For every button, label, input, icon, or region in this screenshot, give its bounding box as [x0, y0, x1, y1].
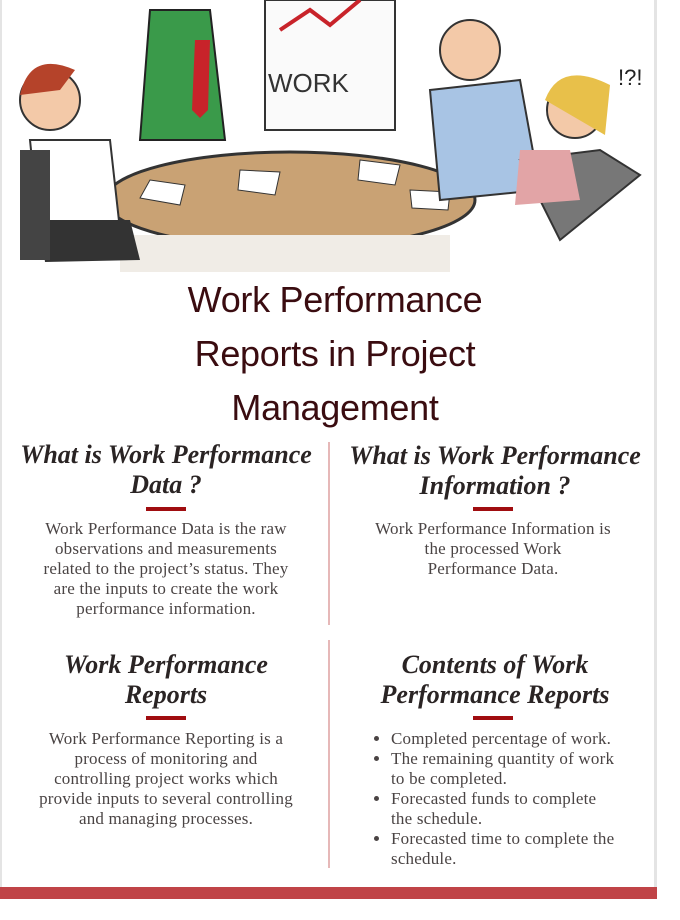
- text: Performance Data.: [428, 559, 558, 578]
- heading: [20, 440, 312, 499]
- illustration: meeting: [19, 0, 642, 272]
- panel: contents: [374, 650, 614, 868]
- bullet list: to be completed.: [391, 769, 507, 788]
- text: [43, 519, 289, 618]
- heading: Data ?: [130, 470, 202, 499]
- illustration: meeting: !?!: [618, 65, 642, 90]
- panel: information: [349, 441, 641, 578]
- title: Work Performance: [188, 279, 482, 320]
- heading: Performance Reports: [381, 680, 609, 709]
- text: the processed Work: [425, 539, 561, 558]
- text: [375, 519, 611, 578]
- heading: Reports: [125, 680, 207, 709]
- heading: [64, 650, 268, 709]
- title: Reports in Project: [195, 333, 475, 374]
- text: provide inputs to several controlling: [39, 789, 293, 808]
- bullet list: Forecasted time to complete the: [391, 829, 614, 848]
- heading: What is Work Performance: [20, 440, 312, 469]
- text: and managing processes.: [79, 809, 253, 828]
- text: Work Performance Data is the raw: [45, 519, 287, 538]
- text: observations and measurements: [55, 539, 277, 558]
- text: related to the project’s status. They: [43, 559, 289, 578]
- heading: What is Work Performance: [349, 441, 641, 470]
- text: [39, 729, 293, 828]
- heading: [380, 650, 609, 709]
- heading: [349, 441, 641, 500]
- text: Work Performance Reporting is a: [49, 729, 283, 748]
- text: performance information.: [76, 599, 256, 618]
- heading: Information ?: [420, 471, 570, 500]
- bullet list: Forecasted funds to complete: [391, 789, 596, 808]
- text: process of monitoring and: [74, 749, 258, 768]
- bullet list: Completed percentage of work.: [391, 729, 611, 748]
- bullet list: schedule.: [391, 849, 457, 868]
- title: Management: [231, 387, 439, 428]
- heading: Contents of Work: [402, 650, 588, 679]
- bullet list: [374, 729, 614, 868]
- text: Work Performance Information is: [375, 519, 611, 538]
- text: controlling project works which: [54, 769, 278, 788]
- bullet list: The remaining quantity of work: [391, 749, 614, 768]
- title: [188, 279, 482, 428]
- panel: data: [20, 440, 312, 618]
- footer bar: [0, 887, 657, 899]
- text: are the inputs to create the work: [54, 579, 278, 598]
- heading: Work Performance: [64, 650, 268, 679]
- illustration: meeting: WORK: [268, 68, 350, 98]
- panel: reports: [39, 650, 293, 828]
- bullet list: the schedule.: [391, 809, 482, 828]
